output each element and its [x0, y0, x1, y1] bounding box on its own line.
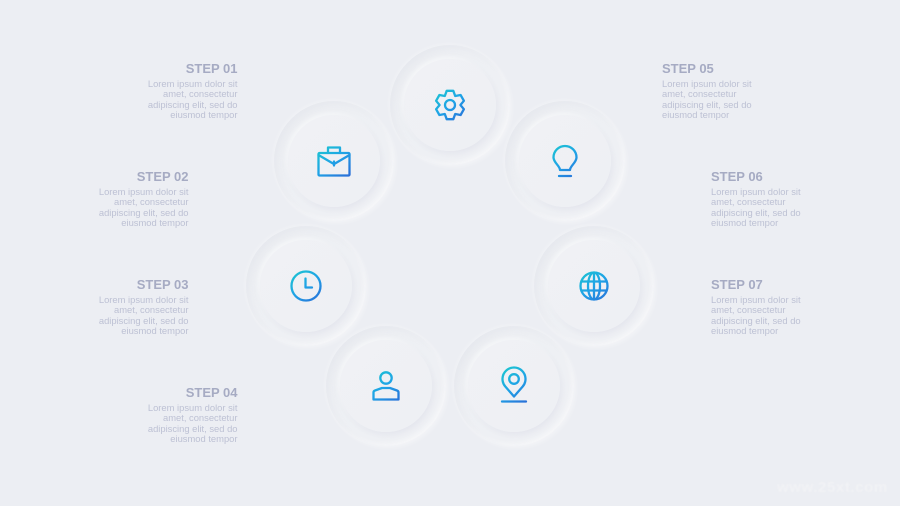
icon: globe	[579, 271, 609, 301]
text: step 02: adipiscing elit, sed do	[99, 207, 188, 218]
text: step 07: amet, consectetur	[711, 304, 786, 315]
text: step 06	[711, 168, 801, 228]
icon: map pin	[500, 366, 528, 403]
text: step 06: STEP 06	[711, 168, 763, 184]
text: step 02: eiusmod tempor	[121, 217, 188, 228]
text: step 01: Lorem ipsum dolor sit	[148, 78, 238, 89]
text: step 07: eiusmod tempor	[711, 325, 778, 336]
text: step 05: eiusmod tempor	[662, 109, 729, 120]
node: step 04 person	[326, 326, 446, 446]
text: step 04: STEP 04	[186, 384, 238, 400]
icon: briefcase	[317, 146, 351, 177]
node: step 01 gear	[390, 45, 510, 165]
node: step 02 briefcase	[274, 101, 394, 221]
text: step 04: amet, consectetur	[163, 412, 238, 423]
text: step 06: Lorem ipsum dolor sit	[711, 186, 801, 197]
text: step 03: eiusmod tempor	[121, 325, 188, 336]
text: step 04: eiusmod tempor	[170, 433, 238, 444]
text: step 03: adipiscing elit, sed do	[99, 315, 188, 326]
text: step 05: Lorem ipsum dolor sit	[662, 78, 752, 89]
node: step 05 bulb	[505, 101, 625, 221]
text: step 02: amet, consectetur	[114, 196, 188, 207]
text: step 07: adipiscing elit, sed do	[711, 315, 801, 326]
text: step 03: STEP 03	[137, 276, 188, 292]
text: step 06: eiusmod tempor	[711, 217, 778, 228]
icon: person	[372, 371, 400, 401]
text: step 05: amet, consectetur	[662, 88, 737, 99]
text: step 06: adipiscing elit, sed do	[711, 207, 801, 218]
text: step 01: eiusmod tempor	[170, 109, 238, 120]
text: step 02: STEP 02	[137, 168, 188, 184]
text: step 01	[148, 60, 238, 120]
watermark: www.25xt.com	[777, 479, 888, 496]
text: step 04: Lorem ipsum dolor sit	[148, 402, 238, 413]
icon: light bulb	[552, 144, 578, 178]
icon: gear	[434, 90, 465, 120]
text: step 07	[711, 276, 801, 336]
text: step 05	[662, 60, 752, 120]
text: step 04: adipiscing elit, sed do	[148, 423, 238, 434]
text: step 07: Lorem ipsum dolor sit	[711, 294, 801, 305]
node: step 06 pin	[454, 326, 574, 446]
text: step 03: Lorem ipsum dolor sit	[99, 294, 188, 305]
text: step 01: STEP 01	[186, 60, 238, 76]
text: step 04	[148, 384, 238, 444]
icon: clock	[290, 270, 322, 302]
text: step 07: STEP 07	[711, 276, 763, 292]
text: step 01: amet, consectetur	[163, 88, 238, 99]
text: step 01: adipiscing elit, sed do	[148, 99, 238, 110]
text: step 02	[99, 168, 188, 228]
text: step 03: amet, consectetur	[114, 304, 188, 315]
node: step 03 clock	[246, 226, 366, 346]
text: step 02: Lorem ipsum dolor sit	[99, 186, 188, 197]
text: step 05: adipiscing elit, sed do	[662, 99, 752, 110]
node: step 07 globe	[534, 226, 654, 346]
text: step 05: STEP 05	[662, 60, 714, 76]
text: step 06: amet, consectetur	[711, 196, 786, 207]
text: step 03	[99, 276, 188, 336]
